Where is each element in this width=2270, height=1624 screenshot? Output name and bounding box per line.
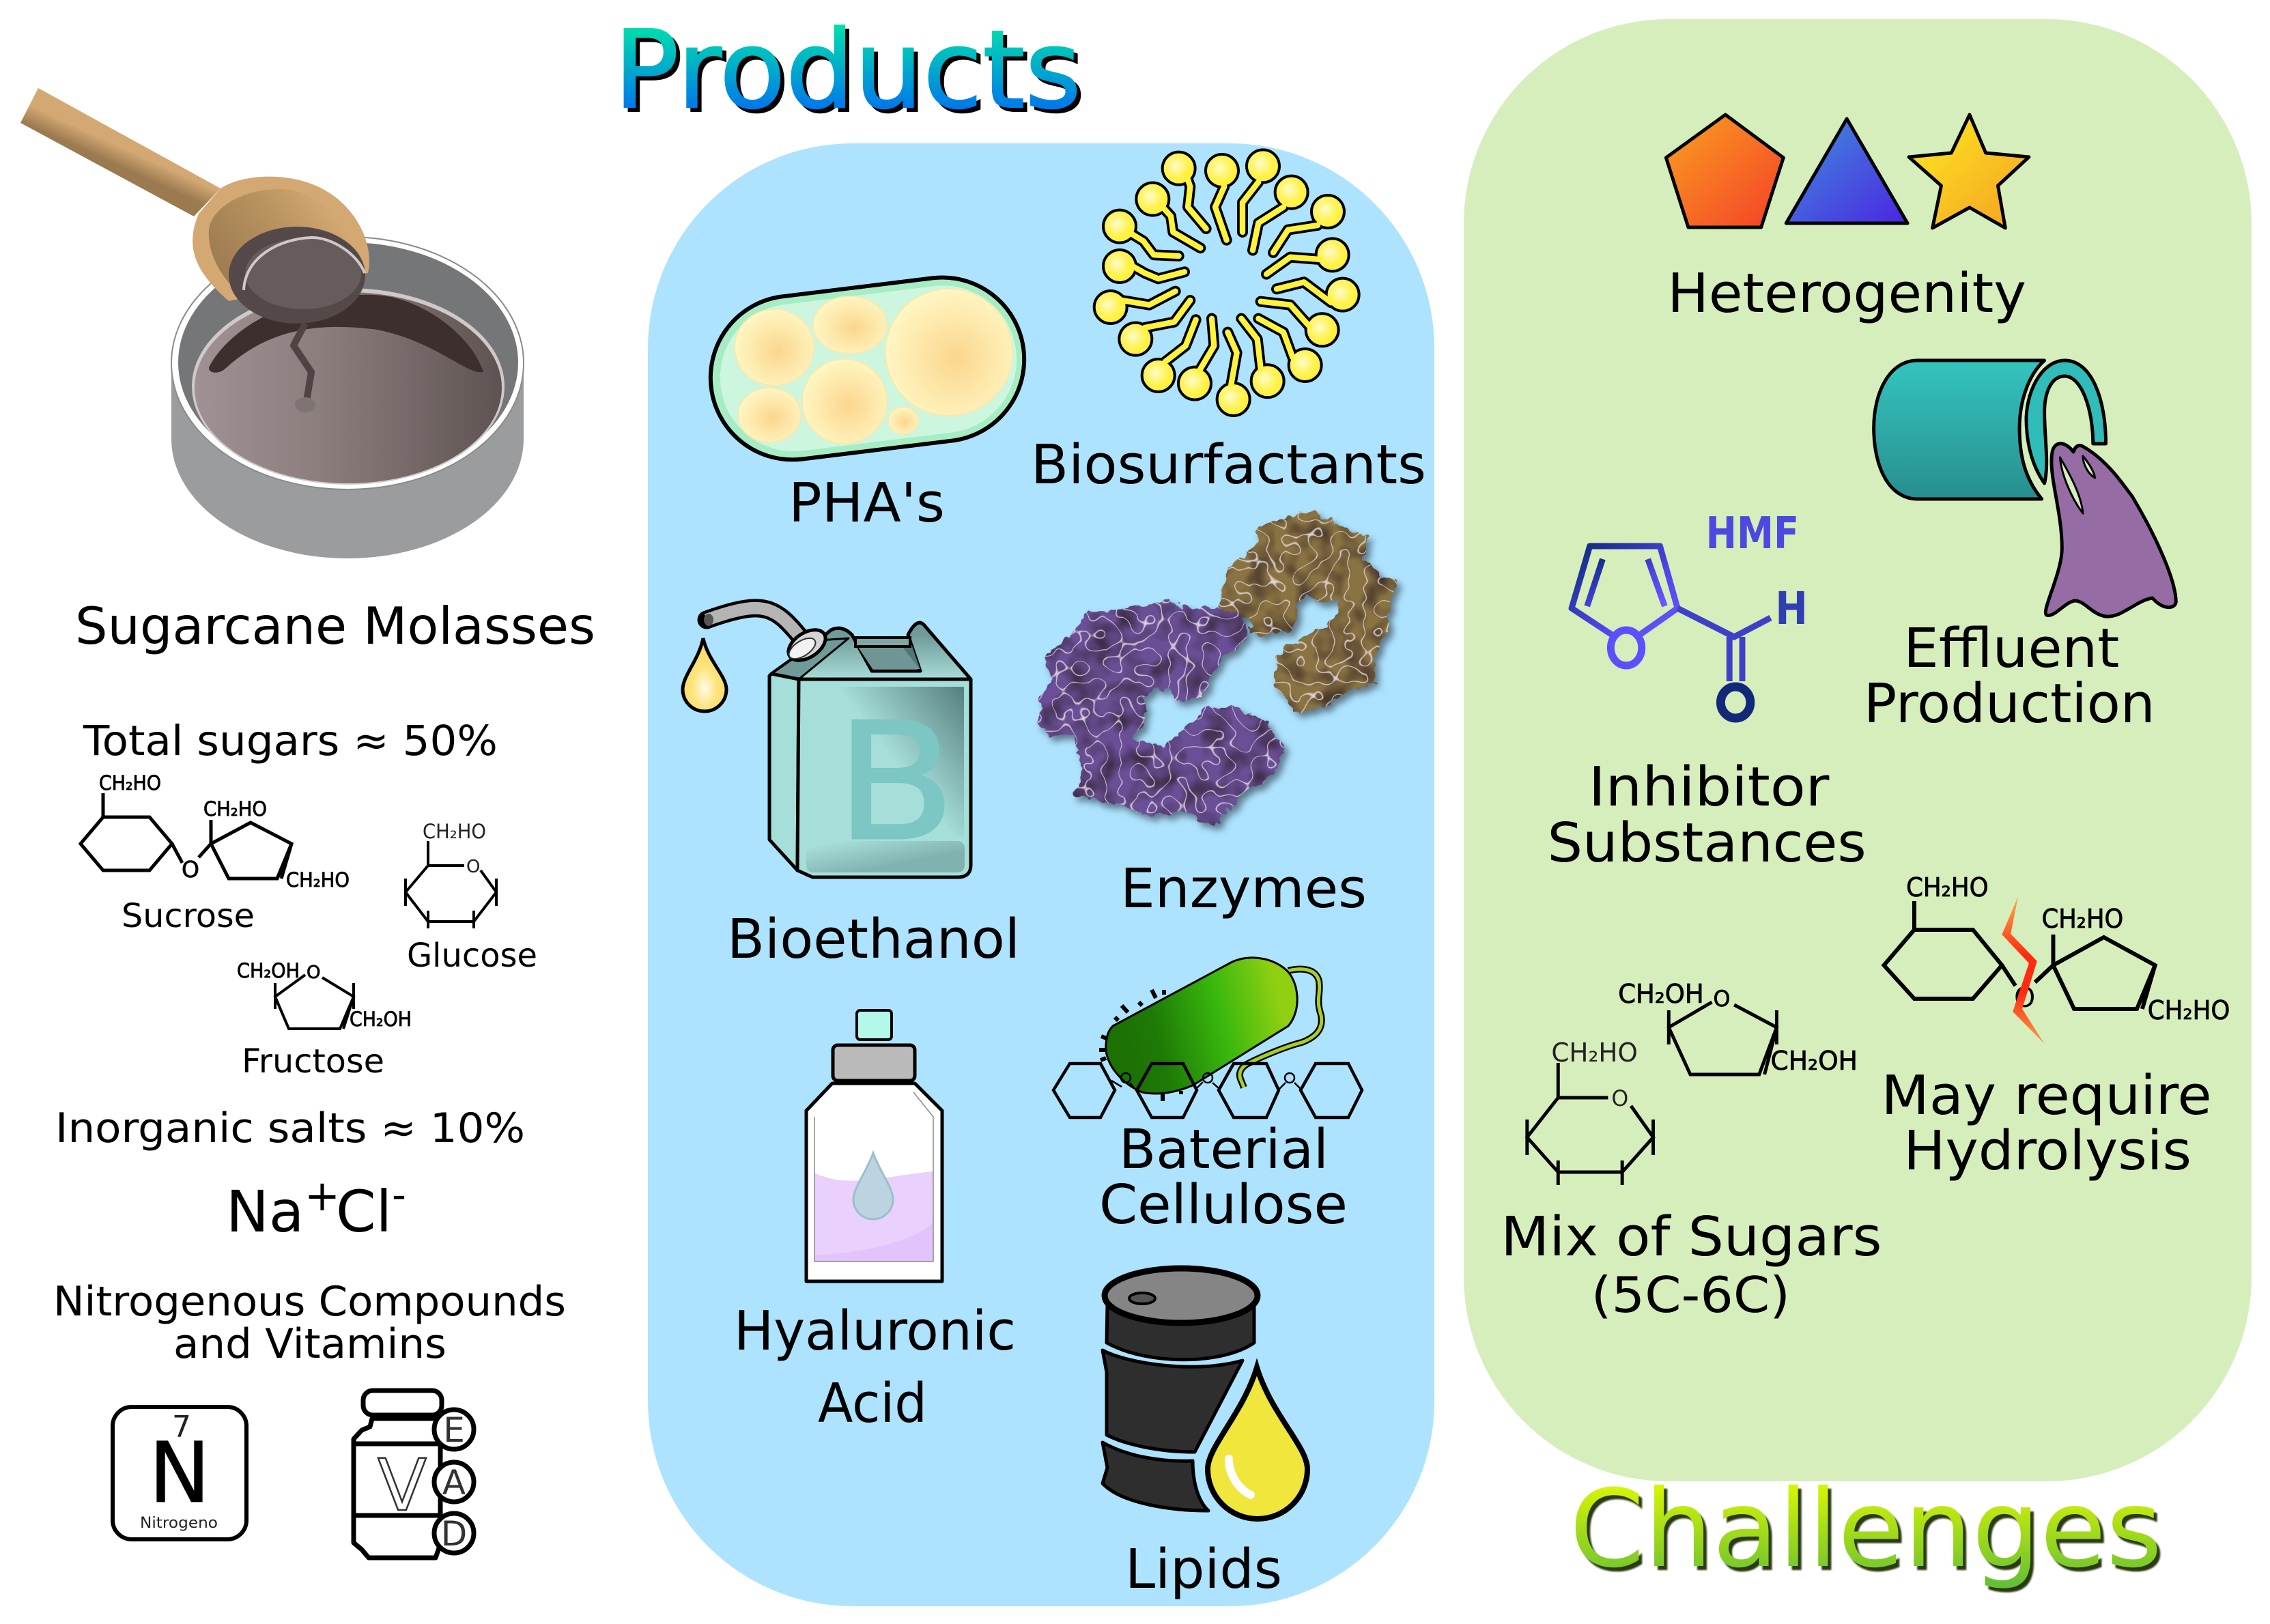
panel: products background: [648, 143, 1434, 1606]
icon: fructose structure: CH₂OH: [237, 959, 300, 982]
text: nitrogenous compounds and vitamins: Nitrogenous Compounds: [53, 1278, 566, 1326]
label: May require Hydrolysis: May require: [1882, 1064, 2212, 1127]
title: Challenges: Challenges: [1570, 1467, 2162, 1592]
icon: vitamin bottle E A D: [354, 1391, 474, 1558]
label: PHA's: PHA's: [789, 472, 945, 535]
label: Hyaluronic Acid: Hyaluronic: [734, 1300, 1016, 1363]
icon: sucrose hydrolysis: O: [2014, 982, 2035, 1014]
label: Sucrose: Sucrose: [122, 897, 255, 935]
label: Inhibitor Substances: [1547, 756, 1867, 874]
icon: bacterium on cellulose: [1053, 958, 1362, 1117]
icon: biosurfactant micelle: [1094, 149, 1359, 416]
icon: vitamin bottle E A D: E: [443, 1410, 465, 1450]
icon: bioethanol jerrycan: [683, 608, 971, 877]
icon: nitrogen periodic table tile: 7: [172, 1410, 191, 1444]
icon: mix of sugars structures: [1527, 979, 1858, 1185]
icon: lipid barrel with oil drop: [1103, 1268, 1307, 1519]
icon: nitrogen periodic table tile: N: [149, 1425, 210, 1522]
label: Effluent Production: Production: [1864, 672, 2155, 735]
icon: glucose structure: CH₂HO: [423, 820, 486, 843]
icon: vitamin bottle E A D: D: [441, 1514, 467, 1554]
icon: HMF inhibitor molecule: H: [1775, 583, 1808, 635]
icon: mix of sugars structures: CH₂OH: [1618, 979, 1704, 1009]
icon: sucrose hydrolysis: CH₂HO: [2042, 904, 2123, 934]
text: sodium chloride formula: Na: [226, 1178, 304, 1245]
icon: fructose structure: CH₂OH: [350, 1008, 412, 1031]
label: Lipids: Lipids: [1125, 1538, 1282, 1601]
label: Mix of Sugars (5C-6C): [1501, 1206, 1882, 1324]
label: Hyaluronic Acid: [734, 1300, 1016, 1435]
title: Products: Products: [614, 8, 1081, 133]
icon: mix of sugars structures: O: [1611, 1086, 1628, 1111]
icon: heterogeneity shapes: [1666, 115, 2029, 228]
text: sodium chloride formula: +: [304, 1171, 340, 1221]
icon: HMF inhibitor molecule: HMF: [1706, 509, 1799, 559]
panel: products content: [683, 149, 1426, 1601]
icon: PHA granules in cell: [701, 268, 1034, 469]
icon: sucrose structure: [81, 771, 350, 892]
label: Baterial Cellulose: Baterial: [1119, 1118, 1329, 1181]
label: Bioethanol: Bioethanol: [727, 908, 1020, 971]
panel: challenges content: [1501, 115, 2230, 1324]
icon: vitamin bottle E A D: A: [442, 1463, 466, 1502]
text: sodium chloride formula: -: [392, 1171, 406, 1218]
icon: nitrogen periodic table tile: Nitrogeno: [140, 1515, 218, 1532]
icon: sucrose structure: O: [182, 856, 199, 883]
text: nitrogenous compounds and vitamins: [53, 1278, 566, 1368]
icon: sucrose hydrolysis: CH₂HO: [1906, 872, 1989, 902]
icon: sucrose structure: CH₂HO: [99, 771, 161, 795]
icon: molasses pan with spoon: [20, 88, 524, 558]
icon: HMF inhibitor molecule: [1572, 509, 1808, 718]
label: Effluent Production: [1864, 617, 2155, 735]
icon: bioethanol jerrycan: B: [836, 688, 956, 877]
icon: sucrose structure: CH₂HO: [203, 797, 267, 821]
icon: sucrose hydrolysis: CH₂HO: [2148, 995, 2230, 1025]
label: Baterial Cellulose: [1099, 1118, 1348, 1236]
text: nitrogenous compounds and vitamins: and Vitamins: [173, 1320, 446, 1368]
icon: mix of sugars structures: CH₂OH: [1770, 1046, 1858, 1076]
label: Biosurfactants: Biosurfactants: [1031, 433, 1426, 496]
panel: challenges background: [1464, 19, 2252, 1481]
label: Glucose: Glucose: [407, 937, 537, 975]
icon: nitrogen periodic table tile: [113, 1407, 246, 1539]
icon: fructose structure: [237, 959, 412, 1031]
text: total sugars: Total sugars ≈ 50%: [83, 717, 498, 765]
icon: sucrose structure: CH₂HO: [286, 868, 350, 892]
icon: effluent pipe: [1874, 360, 2176, 616]
icon: fructose structure: O: [307, 963, 320, 983]
icon: hyaluronic acid bottle: [806, 1010, 942, 1281]
icon: glucose structure: O: [466, 857, 480, 877]
label: Inhibitor Substances: Inhibitor: [1589, 756, 1830, 818]
text: sodium chloride formula: Cl: [336, 1178, 392, 1245]
icon: sucrose hydrolysis: [1884, 872, 2230, 1044]
text: inorganic salts: Inorganic salts ≈ 10%: [55, 1105, 525, 1152]
label: Fructose: Fructose: [242, 1042, 384, 1081]
heading: Sugarcane Molasses: Sugarcane Molasses: [75, 596, 595, 656]
label: May require Hydrolysis: [1882, 1064, 2212, 1182]
label: Enzymes: Enzymes: [1120, 857, 1367, 920]
icon: mix of sugars structures: CH₂HO: [1551, 1038, 1638, 1068]
label: Baterial Cellulose: Cellulose: [1099, 1173, 1348, 1236]
label: Effluent Production: Effluent: [1903, 617, 2119, 680]
label: Mix of Sugars (5C-6C): (5C-6C): [1591, 1267, 1790, 1324]
label: Mix of Sugars (5C-6C): Mix of Sugars: [1501, 1206, 1882, 1268]
icon: vitamin bottle E A D: V: [378, 1444, 427, 1527]
icon: enzyme complex: [1038, 510, 1398, 828]
icon: mix of sugars structures: O: [1714, 986, 1730, 1012]
label: Hyaluronic Acid: Acid: [818, 1372, 927, 1435]
label: May require Hydrolysis: Hydrolysis: [1903, 1120, 2191, 1182]
icon: glucose structure: [406, 820, 496, 928]
label: Heterogenity: Heterogenity: [1667, 262, 2026, 325]
label: Inhibitor Substances: Substances: [1547, 812, 1867, 874]
panel: sugarcane molasses column: [20, 88, 595, 1558]
